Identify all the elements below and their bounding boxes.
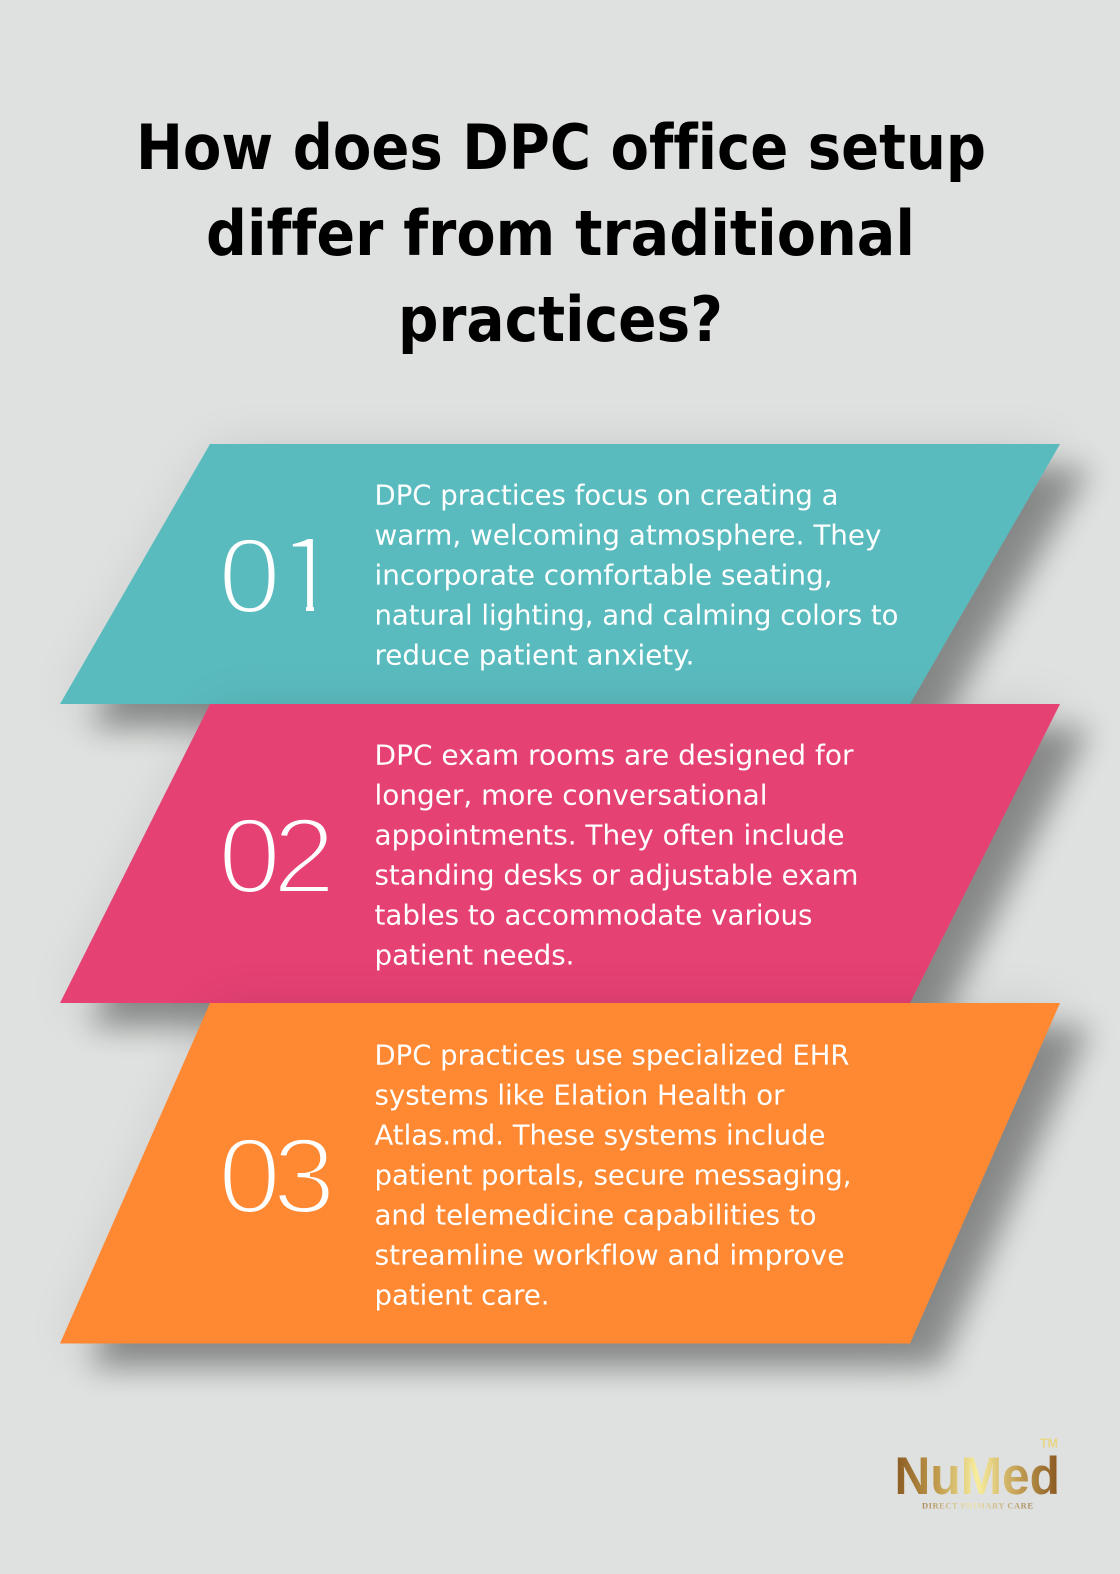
step 02 text <box>374 738 858 972</box>
step number 03: 03 <box>218 1116 336 1236</box>
panel 02 background shape <box>60 704 1060 1003</box>
panel 01 background shape <box>60 444 1060 704</box>
title: How does DPC office setup <box>136 111 986 184</box>
step 02 text: patient needs. <box>374 938 574 972</box>
logo: NuMed <box>894 1436 1060 1510</box>
step 03 text: streamline workflow and improve <box>374 1238 844 1272</box>
step 02 text: tables to accommodate various <box>374 898 812 932</box>
step number 01 <box>224 539 314 612</box>
step 02 text: appointments. They often include <box>374 818 844 852</box>
panel: step 02 <box>60 704 1060 1003</box>
logo tagline: DIRECT PRIMARY CARE <box>922 1500 1033 1510</box>
step 01 text: natural lighting, and calming colors to <box>374 598 898 632</box>
panel 03 background shape <box>60 1003 1060 1344</box>
title: practices? <box>398 283 723 356</box>
step 03 text: and telemedicine capabilities to <box>374 1198 816 1232</box>
step number 01: 1 <box>278 492 338 643</box>
title: differ from traditional <box>206 197 915 270</box>
panel: step 03 <box>60 1003 1060 1344</box>
panel: step 01 <box>60 444 1060 704</box>
logo trademark: TM <box>1040 1436 1058 1450</box>
title <box>136 111 986 356</box>
step 02 text: longer, more conversational <box>374 778 768 812</box>
step 01 text: DPC practices focus on creating a <box>374 478 838 512</box>
step 03 text <box>374 1038 852 1312</box>
step 01 text: warm, welcoming atmosphere. They <box>374 518 882 552</box>
step 01 text: reduce patient anxiety. <box>374 638 694 672</box>
step 03 text: patient care. <box>374 1278 550 1312</box>
logo wordmark: NuMed <box>894 1447 1060 1506</box>
step 02 text: DPC exam rooms are designed for <box>374 738 854 772</box>
step 03 text: DPC practices use specialized EHR <box>374 1038 850 1072</box>
step 03 text: Atlas.md. These systems include <box>374 1118 826 1152</box>
step 01 text: incorporate comfortable seating, <box>374 558 832 592</box>
step number 02: 02 <box>218 796 336 916</box>
step number 01: 0 <box>218 516 281 636</box>
step 03 text: systems like Elation Health or <box>374 1078 785 1112</box>
step 03 text: patient portals, secure messaging, <box>374 1158 852 1192</box>
step 01 text <box>374 478 898 672</box>
step 02 text: standing desks or adjustable exam <box>374 858 858 892</box>
